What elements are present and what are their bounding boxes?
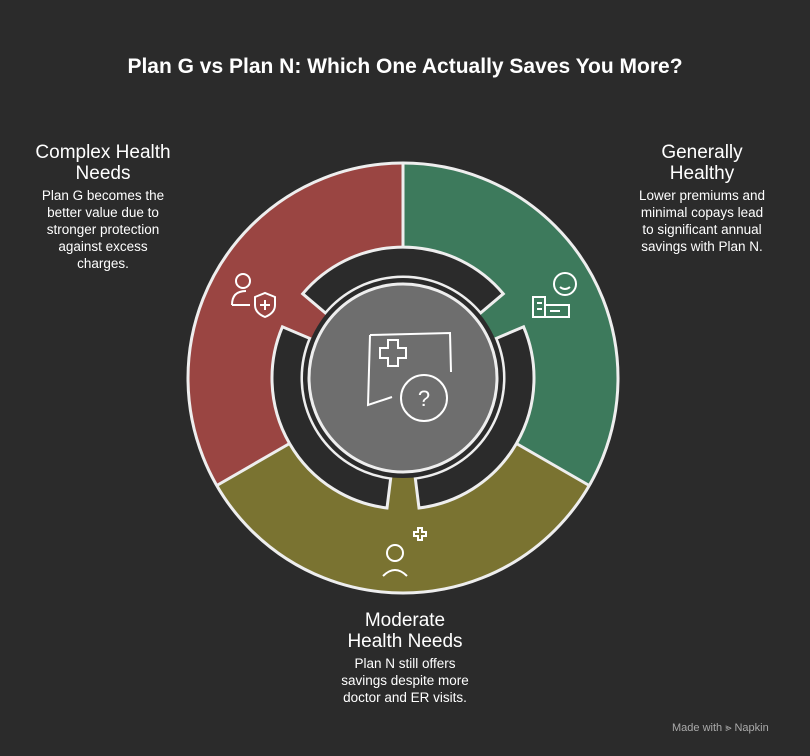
text: complex health needs: Complex Health (35, 142, 171, 163)
text: complex health needs: charges. (77, 256, 129, 271)
segment: red (188, 163, 403, 486)
text: complex health needs: against excess (58, 239, 148, 254)
icon: red person shield (232, 274, 275, 317)
text: complex health needs: better value due to (47, 205, 159, 220)
text: complex health needs: stronger protection (47, 222, 159, 237)
text: moderate health needs: doctor and ER visits. (343, 690, 467, 705)
text: moderate health needs: Health Needs (347, 631, 463, 652)
text: complex health needs (35, 142, 171, 271)
text: generally healthy: savings with Plan N. (641, 239, 763, 254)
text: moderate health needs (341, 610, 469, 705)
footer: Made with ⪢ Napkin (672, 722, 769, 734)
text: moderate health needs: Plan N still offers (354, 656, 456, 671)
icon: center (368, 333, 451, 421)
text: generally healthy: minimal copays lead (641, 205, 763, 220)
text: generally healthy: Generally (661, 142, 743, 163)
segment: green (403, 163, 618, 486)
text: generally healthy: Lower premiums and (639, 188, 765, 203)
icon: green smile (533, 273, 576, 317)
icon: olive person plus (383, 528, 426, 576)
text: generally healthy (639, 142, 765, 254)
title: Plan G vs Plan N: Which One Actually Saves You More? (127, 55, 683, 78)
inner ring: top piece (303, 247, 503, 313)
segment: olive (217, 378, 589, 593)
text: generally healthy: Healthy (670, 163, 734, 184)
text: complex health needs: Needs (76, 163, 130, 184)
center circle (303, 278, 503, 478)
text: generally healthy: to significant annual (642, 222, 762, 237)
text: moderate health needs: savings despite more (341, 673, 469, 688)
inner ring: right piece (415, 327, 534, 508)
inner ring: left piece (272, 327, 391, 508)
text: moderate health needs: Moderate (365, 610, 445, 631)
icon: center: ? (418, 386, 430, 411)
text: complex health needs: Plan G becomes the (42, 188, 164, 203)
